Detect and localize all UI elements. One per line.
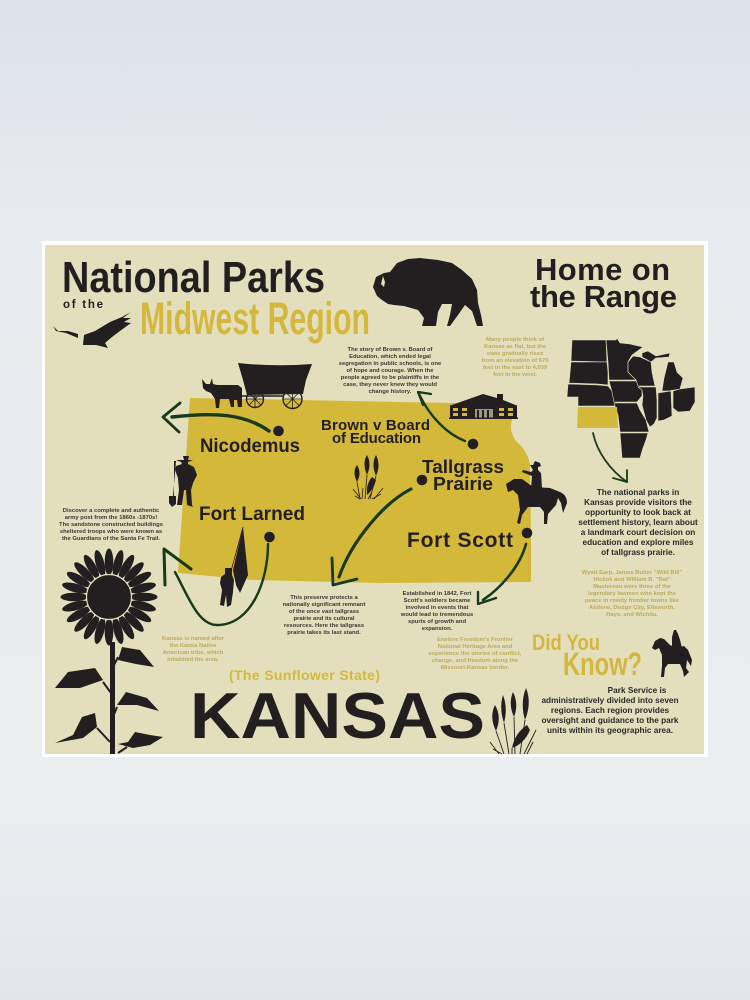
text block: lawmen xyxy=(582,570,682,618)
eagle wing and body xyxy=(83,312,131,348)
heading: Home on the Range: the Range xyxy=(530,279,677,314)
text block: Fort Larned: The sandstone constructed buildings xyxy=(59,522,164,528)
text block: national parks in Kansas: of tallgrass prairie. xyxy=(601,548,675,557)
text block: Brown v. Board of Education: The story of Brown v. Board of xyxy=(348,347,433,353)
stem xyxy=(110,642,115,754)
text block: Freedom's Frontier xyxy=(429,637,522,671)
location: Brown v Board of Education xyxy=(321,392,478,449)
icon: prairie grass at bottom xyxy=(490,688,536,754)
text block: Park Service: regions. Each region provides xyxy=(551,706,670,715)
text block: Freedom's Frontier: National Heritage Area and xyxy=(438,644,513,650)
text block: Fort Larned: Discover a complete and authentic xyxy=(63,508,160,514)
location: Brown v Board of Education: Brown v Board xyxy=(321,417,430,434)
text block: elevation fact: from an elevation of 679 xyxy=(482,358,549,364)
text block: Freedom's Frontier: change, and freedom along the xyxy=(432,658,519,664)
poster frame xyxy=(42,241,708,757)
text block: lawmen: Hays, and Wichita. xyxy=(606,612,658,618)
text block: Fort Scott: Scott's soldiers became xyxy=(404,598,471,604)
map of the Midwest region xyxy=(567,338,695,458)
text block: national parks in Kansas: The national parks in xyxy=(597,488,679,497)
text block: national parks in Kansas: a landmark court decision on xyxy=(581,528,695,537)
text block: Kansa tribe xyxy=(162,636,225,663)
text block: elevation fact: Kansas as flat, but the xyxy=(484,344,547,350)
arrow: to Midwest text xyxy=(593,433,627,482)
location: Nicodemus: Nicodemus xyxy=(200,435,300,457)
text block: Fort Scott: involved in events that xyxy=(406,605,469,611)
text block: Brown v. Board of Education: change history. xyxy=(369,389,412,395)
text block: Freedom's Frontier: Explore Freedom's Frontier xyxy=(437,637,514,643)
text block: Brown v. Board of Education xyxy=(339,347,442,395)
text block: Tallgrass preserve: This preserve protects a xyxy=(290,595,359,601)
text block: Kansa tribe: American tribe, which xyxy=(163,650,224,656)
text block: lawmen: Masterson were three of the xyxy=(593,584,672,590)
text block: Fort Scott: spurts of growth and xyxy=(408,619,466,625)
text block: lawmen: Hickok and William B. "Bat" xyxy=(593,577,671,583)
subtitle: of the: of the xyxy=(63,299,103,311)
text block: elevation fact: state gradually rises xyxy=(487,351,544,357)
text block: Brown v. Board of Education: people agreed to be plaintiffs in the xyxy=(341,375,440,381)
location: Fort Scott xyxy=(407,528,532,604)
eagle tail xyxy=(53,326,78,338)
text block: lawmen: Abilene, Dodge City, Ellsworth, xyxy=(589,605,675,611)
text block: lawmen: peace in rowdy frontier towns like xyxy=(585,598,680,604)
icon: bison xyxy=(373,258,483,326)
location: Fort Larned xyxy=(164,504,305,625)
text block: Fort Larned: sheltered troops who were known as xyxy=(60,529,163,535)
wagon wheels xyxy=(238,390,302,408)
text block: lawmen: legendary lawmen who kept the xyxy=(588,591,677,597)
text block: Brown v. Board of Education: case, they never knew they would xyxy=(343,382,437,388)
heading: Did You Know?: Did You xyxy=(532,630,600,655)
poster background xyxy=(45,245,704,754)
icon: courthouse building xyxy=(449,394,518,419)
icon: farmer with shovel xyxy=(169,456,197,507)
text block: Tallgrass preserve: of the once vast tallgrass xyxy=(289,609,360,615)
text block: Freedom's Frontier: experience the stories of conflict, xyxy=(429,651,522,657)
text block: national parks in Kansas: settlement history, learn about xyxy=(578,518,698,527)
text block: Kansa tribe: Kansas is named after xyxy=(162,636,225,642)
text block: Fort Scott xyxy=(400,591,474,632)
text block: Fort Scott: expansion. xyxy=(422,626,453,632)
location: Tallgrass Prairie xyxy=(332,457,504,585)
heading: KANSAS: KANSAS xyxy=(190,679,485,752)
location: Fort Scott: Fort Scott xyxy=(407,529,513,552)
text block: Brown v. Board of Education: segregation in public schools, is one xyxy=(339,361,442,367)
icon: cowboy on horse xyxy=(506,461,567,524)
text block: Kansa tribe: inhabited the area. xyxy=(167,657,219,663)
text block: Kansa tribe: the Kansa Native xyxy=(169,643,217,649)
text block: national parks in Kansas: education and explore miles xyxy=(583,538,694,547)
text block: Brown v. Board of Education: of hope and courage. When the xyxy=(346,368,434,374)
text block: Park Service: Park Service is xyxy=(608,686,667,695)
sunflower centre xyxy=(86,574,132,620)
map of Kansas xyxy=(178,398,531,583)
heading: Did You Know? xyxy=(532,630,642,682)
text block: elevation fact xyxy=(482,337,549,378)
icon: prairie grass on map xyxy=(353,455,383,499)
heading: Home on the Range: Home on xyxy=(535,252,670,287)
text block: Park Service: administratively divided into seven xyxy=(541,696,679,705)
text block: elevation fact: Many people think of xyxy=(486,337,544,343)
location: Nicodemus xyxy=(163,403,300,457)
text block: lawmen: Wyatt Earp, James Butler "Wild Bill" xyxy=(582,570,682,576)
title: Midwest Region: Midwest Region xyxy=(140,293,370,344)
location: Tallgrass Prairie: Tallgrass xyxy=(422,457,504,477)
text block: Park Service: units within its geographic area. xyxy=(547,726,673,735)
text block: national parks in Kansas xyxy=(578,488,698,557)
wagon canopy xyxy=(238,363,312,395)
text block: Fort Scott: would lead to tremendous xyxy=(400,612,474,618)
text block: Tallgrass preserve: prairie and its cultural xyxy=(293,616,355,622)
heading: The Sunflower State: (The Sunflower State) xyxy=(229,667,380,683)
icon: horse and rider xyxy=(652,630,692,677)
sunflower petals xyxy=(60,548,158,646)
location: Brown v Board of Education: of Education xyxy=(332,430,421,447)
text block: elevation fact: feet in the west. xyxy=(493,372,537,378)
text block: Fort Larned: army post from the 1860s -1870s! xyxy=(65,515,157,521)
leaves xyxy=(118,647,154,667)
text block: Park Service xyxy=(541,686,679,735)
icon: eagle xyxy=(53,312,131,348)
icon: covered wagon with ox xyxy=(202,363,312,408)
text block: Freedom's Frontier: Missouri-Kansas border. xyxy=(441,665,509,671)
text block: Tallgrass preserve xyxy=(283,595,365,636)
text block: Brown v. Board of Education: Education, which ended legal xyxy=(349,354,431,360)
bison horn xyxy=(381,276,385,287)
ox xyxy=(202,378,242,408)
text block: Tallgrass preserve: resources. Here the tallgrass xyxy=(284,623,365,629)
location: Fort Larned: Fort Larned xyxy=(199,504,305,525)
title: National Parks: National Parks xyxy=(62,253,325,302)
icon: sunflower xyxy=(55,548,163,754)
text block: national parks in Kansas: Kansas provide visitors the xyxy=(584,498,692,507)
text block: Fort Scott: Established in 1842, Fort xyxy=(403,591,471,597)
heading: Home on the Range xyxy=(530,252,677,314)
icon: soldier with flag xyxy=(220,527,248,607)
text block: Fort Larned xyxy=(59,508,164,542)
text block: Fort Larned: the Guardians of the Santa Fe Trail. xyxy=(62,536,160,542)
heading: Did You Know?: Know? xyxy=(563,646,642,682)
text block: Park Service: oversight and guidance to the park xyxy=(541,716,679,725)
text block: Tallgrass preserve: prairie takes its last stand. xyxy=(287,630,361,636)
text block: elevation fact: feet in the east to 4,039 xyxy=(483,365,548,371)
location: Tallgrass Prairie: Prairie xyxy=(433,474,493,494)
text block: Tallgrass preserve: nationally significant remnant xyxy=(283,602,365,608)
text block: national parks in Kansas: opportunity to look back at xyxy=(585,508,691,517)
